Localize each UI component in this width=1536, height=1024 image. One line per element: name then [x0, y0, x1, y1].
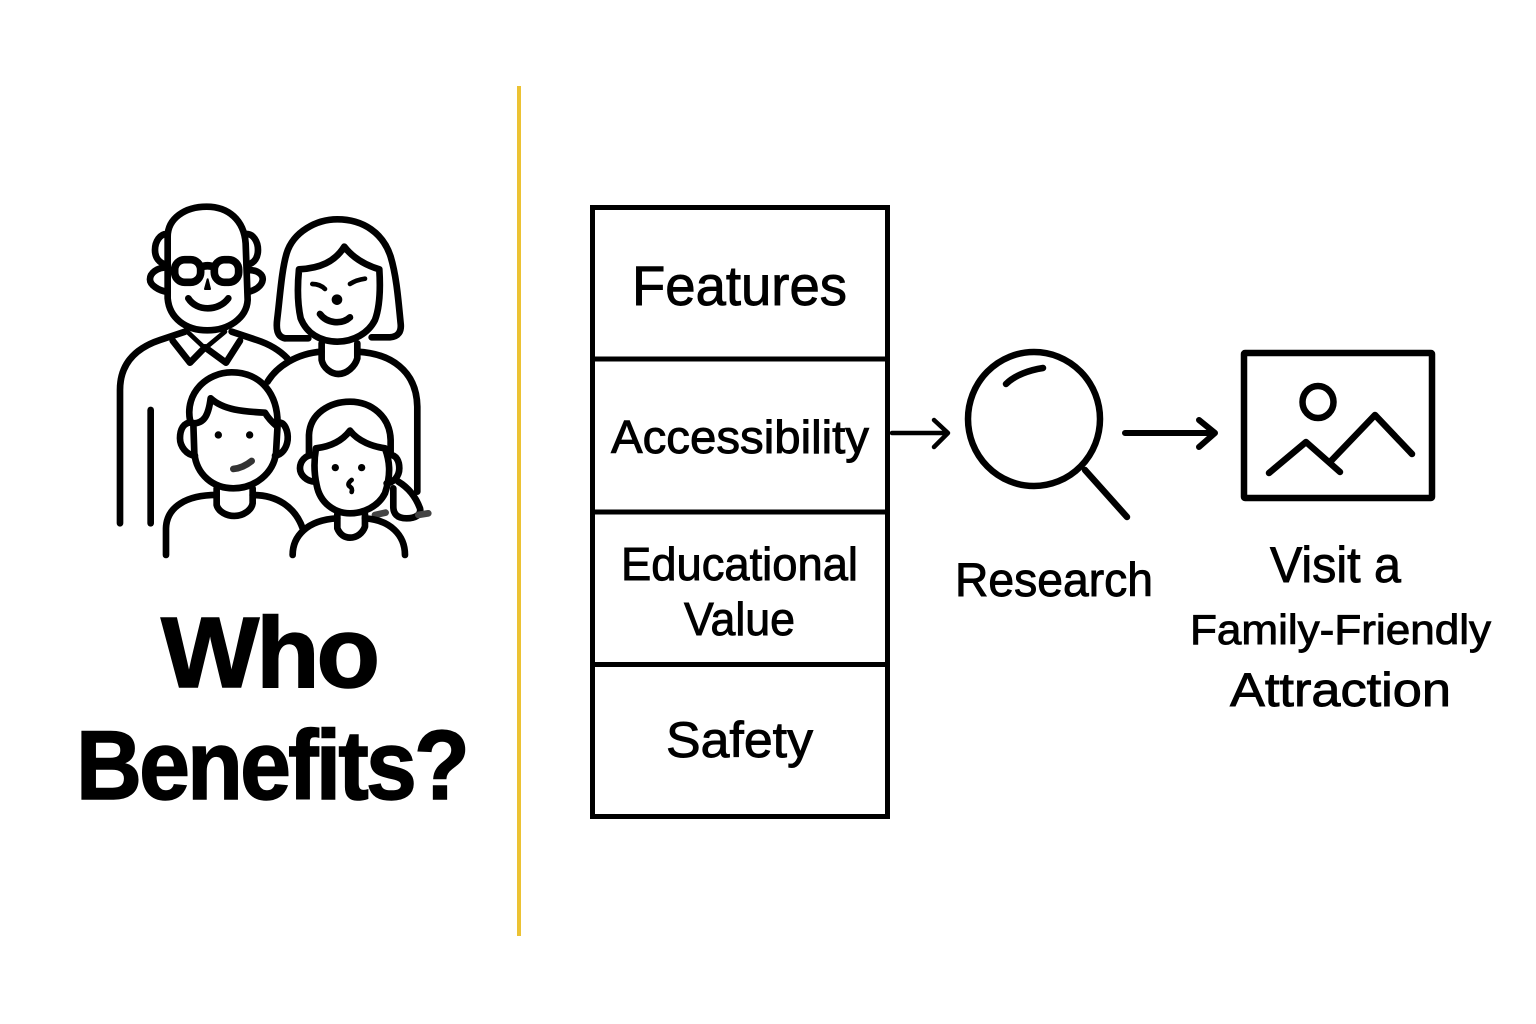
label: Research: Research [955, 553, 1153, 606]
father-son figure [166, 372, 303, 555]
mother [268, 219, 428, 518]
label: Visit a Family-Friendly Attraction: Attraction [1230, 663, 1451, 716]
label: Visit a Family-Friendly Attraction [1190, 537, 1491, 716]
daughter [293, 402, 405, 555]
row: Educational Value [621, 538, 858, 645]
panel: criteria table [592, 208, 888, 816]
arrow: research to attraction [1125, 420, 1215, 447]
arrow: table to research [892, 420, 948, 447]
icon: magnifying glass [968, 352, 1127, 517]
title: Benefits? [76, 710, 467, 820]
label: Visit a Family-Friendly Attraction: Family-Friendly [1190, 606, 1491, 653]
title [76, 597, 467, 820]
title: Who [161, 597, 377, 709]
label: Visit a Family-Friendly Attraction: Visit a [1270, 537, 1401, 593]
row: Educational Value: Educational [621, 538, 858, 590]
table frame [592, 208, 888, 816]
grandfather [120, 207, 287, 523]
icon: family group [120, 207, 428, 555]
divider line [517, 86, 521, 936]
icon: picture frame [1244, 353, 1432, 498]
row: Features: Features [632, 254, 847, 317]
row: Safety: Safety [666, 712, 813, 768]
row: Accessibility: Accessibility [611, 411, 869, 463]
row: Educational Value: Value [684, 593, 795, 645]
